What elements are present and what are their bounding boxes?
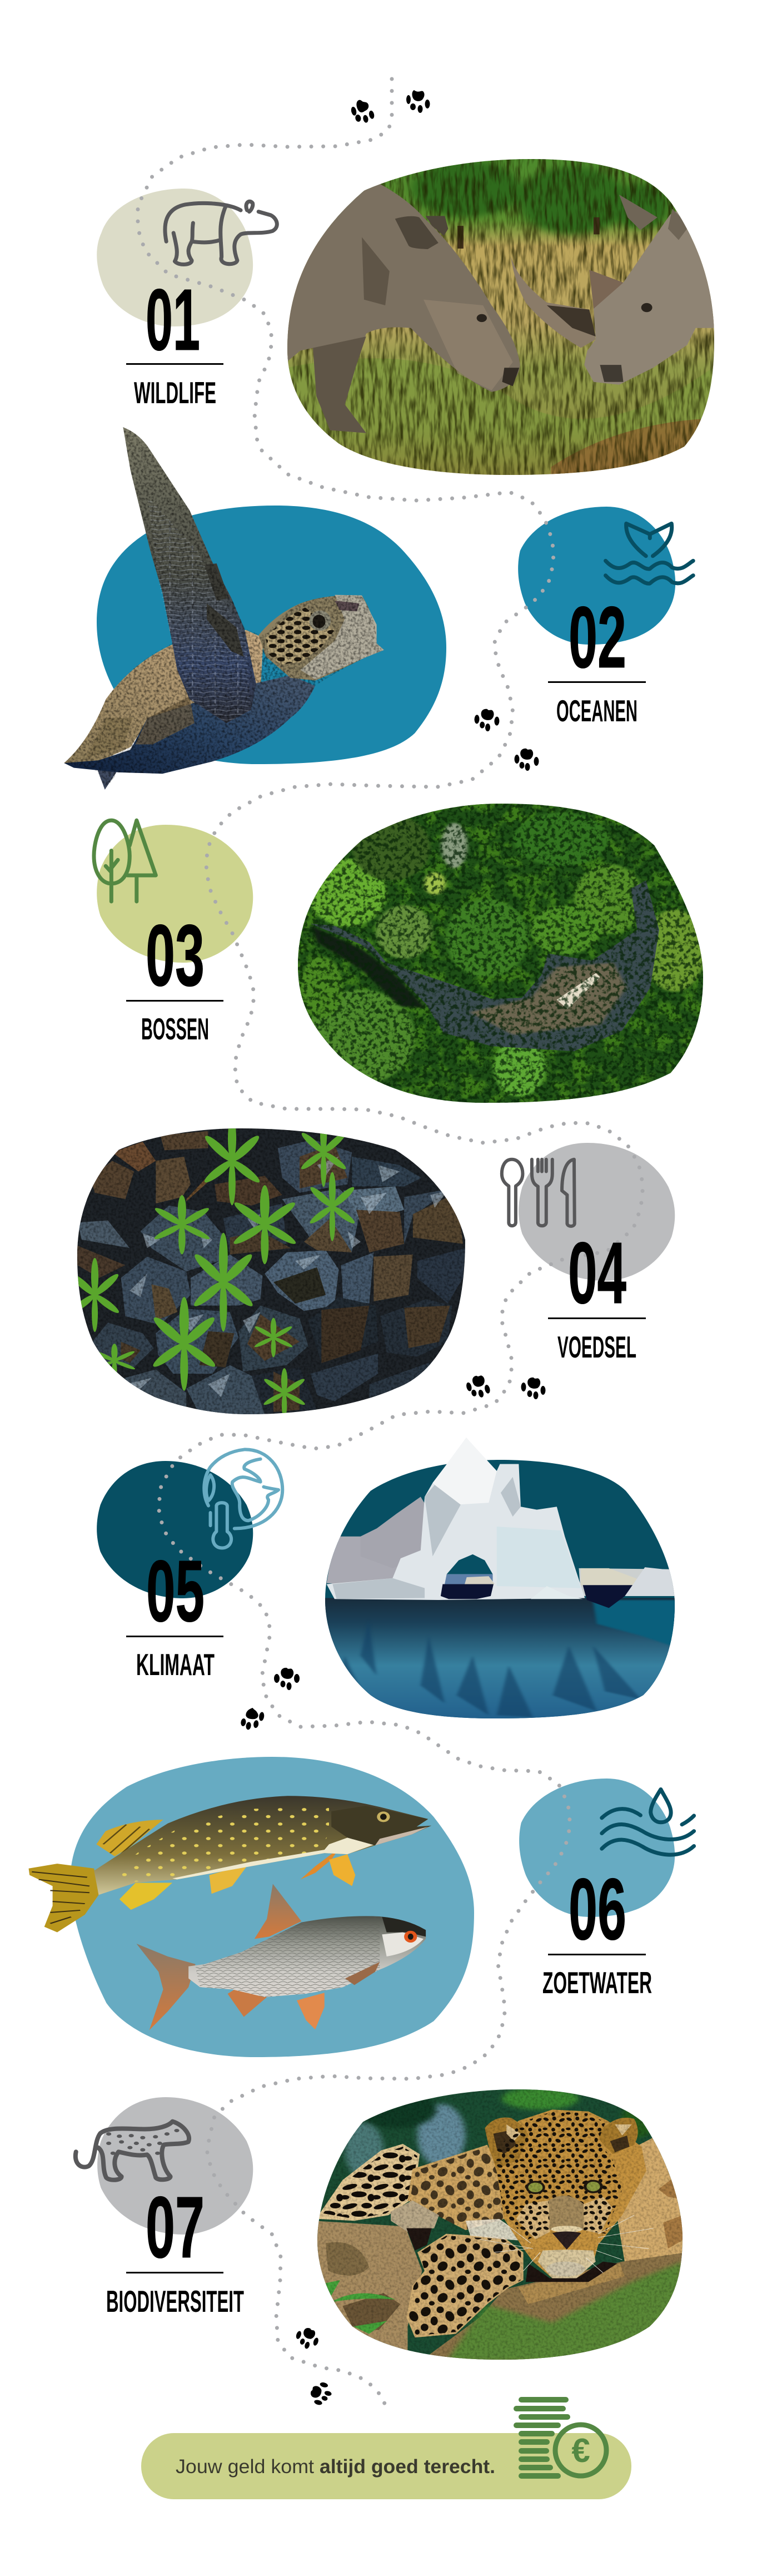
- photo: turtle: [56, 423, 389, 801]
- paw print: [515, 749, 539, 771]
- paw print: [240, 1707, 265, 1732]
- paw print: [308, 2380, 334, 2407]
- paw print: [465, 1373, 491, 1400]
- blob: oceanen: [518, 507, 675, 645]
- paw print: [521, 1378, 546, 1399]
- blob: turtle backdrop: [97, 506, 446, 764]
- section label: 05 klimaat: KLIMAAT: [136, 1647, 215, 1682]
- foreleg: [406, 2234, 524, 2337]
- head: [490, 2109, 646, 2278]
- left log: [317, 2221, 422, 2350]
- paw print: [350, 98, 376, 125]
- pike: [29, 1796, 431, 1932]
- right log: [617, 2138, 683, 2261]
- section label: 02 oceanen: 02: [569, 589, 626, 686]
- section label: 07 biodiversiteit: BIODIVERSITEIT: [106, 2284, 244, 2319]
- rump: [318, 2144, 420, 2221]
- section label: 01 wildlife: [126, 271, 223, 410]
- paw print: [293, 2325, 321, 2351]
- icon: water drop and waves: [602, 1789, 694, 1855]
- photo: forest river: [295, 801, 706, 1107]
- blob: wildlife: [97, 189, 253, 326]
- photo: two fish: [29, 1796, 431, 2030]
- icon: trees: [94, 820, 156, 901]
- icon: euro coin stack: €: [571, 2432, 590, 2469]
- icon: euro coin stack: [514, 2397, 606, 2479]
- lower log: [420, 2252, 688, 2362]
- blob: fish backdrop: [70, 1757, 474, 2057]
- blob: klimaat: [97, 1461, 253, 1598]
- paw print: [274, 1668, 300, 1690]
- section label: 07 biodiversiteit: [106, 2179, 244, 2319]
- section label: 01 wildlife: WILDLIFE: [134, 375, 216, 410]
- photo: iceberg: [325, 1438, 677, 1721]
- photo: rhinos: [283, 156, 721, 477]
- section label: 06 zoetwater: [542, 1861, 652, 2000]
- call to action pill: altijd goed terecht.: [320, 2456, 495, 2478]
- section label: 01 wildlife: 01: [146, 271, 200, 369]
- icon: cutlery: [502, 1160, 575, 1226]
- blob: voedsel: [519, 1143, 675, 1281]
- section label: 03 bossen: 03: [146, 907, 205, 1004]
- blob: zoetwater: [519, 1779, 675, 1917]
- section label: 04 voedsel: [548, 1225, 646, 1364]
- leaves: [322, 2280, 396, 2334]
- section label: 03 bossen: [126, 907, 223, 1046]
- icon: globe and thermometer: [204, 1449, 282, 1548]
- section label: 04 voedsel: 04: [568, 1225, 626, 1322]
- photo: seedlings in black bags: [69, 1116, 470, 1418]
- section label: 02 oceanen: [548, 589, 646, 728]
- section label: 07 biodiversiteit: 07: [146, 2179, 205, 2276]
- body: [407, 2145, 504, 2230]
- section label: 06 zoetwater: ZOETWATER: [542, 1965, 652, 2000]
- photo: leopard: [311, 2085, 689, 2364]
- call to action pill: [141, 2433, 631, 2499]
- call to action pill: Jouw geld komt: [176, 2456, 314, 2478]
- section label: 05 klimaat: [126, 1543, 223, 1682]
- dotted trail: [138, 79, 643, 2410]
- rhino left: [283, 180, 520, 433]
- section label: 03 bossen: BOSSEN: [141, 1012, 209, 1046]
- roach: [136, 1884, 426, 2030]
- blob: bossen: [97, 825, 253, 963]
- icon: rhino: [165, 201, 277, 265]
- blob: biodiversiteit: [97, 2097, 253, 2235]
- icon: whale tail and waves: [606, 523, 693, 583]
- paw print: [406, 90, 430, 113]
- rhino right: [511, 256, 596, 348]
- section label: 02 oceanen: OCEANEN: [556, 693, 637, 728]
- section label: 06 zoetwater: 06: [569, 1861, 626, 1958]
- icon: leopard: [76, 2122, 189, 2180]
- section label: 05 klimaat: 05: [146, 1543, 205, 1640]
- section label: 04 voedsel: VOEDSEL: [557, 1330, 636, 1364]
- paw print: [474, 709, 500, 732]
